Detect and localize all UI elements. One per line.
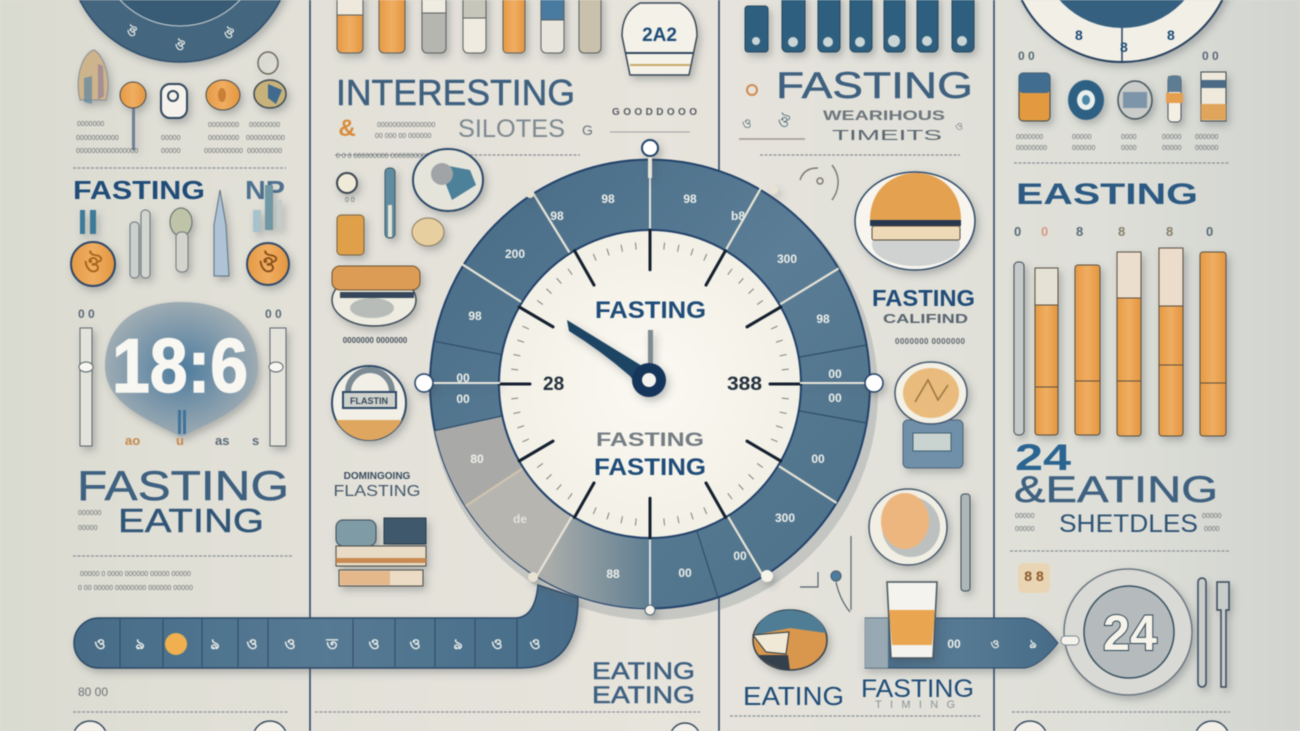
- panel 4: small tile icon: [1018, 563, 1050, 593]
- panel 1: glyph rows: u: [176, 433, 184, 448]
- dial ring labels: 00: [733, 549, 747, 563]
- dial lower labels: FASTING: [596, 430, 704, 451]
- dial lower labels: [594, 430, 706, 481]
- panel 4: small captions: 00000: [1162, 134, 1182, 141]
- panel 1: small captions: 00000: [161, 135, 181, 142]
- panel 1: glyph rows: as: [215, 433, 229, 448]
- dial ring labels: 98: [468, 309, 482, 323]
- panel 2: heading INTERESTING: [336, 72, 593, 143]
- timeline bar left: ঌ: [453, 636, 463, 653]
- dial ring labels: 00: [828, 367, 842, 381]
- dial ring labels: b8: [731, 209, 745, 223]
- dial hour ticks: [499, 230, 801, 538]
- panel 3: heading FASTING: ও: [955, 121, 963, 133]
- centre bottom labels: [592, 658, 695, 709]
- dial ring labels: 98: [816, 312, 830, 326]
- dial ring labels: 00: [456, 392, 470, 406]
- panel 4: small captions: 00000000: [1016, 145, 1047, 152]
- dial ring labels: 00: [678, 566, 692, 580]
- panel 4: small captions: 0000: [1121, 134, 1137, 141]
- panel 2: heading INTERESTING: INTERESTING: [336, 72, 575, 113]
- panel 4: small glyphs top: 0 0: [1202, 49, 1219, 63]
- panel 3: heading FASTING: ও: [742, 116, 752, 131]
- centre bottom labels: EATING: [592, 658, 695, 685]
- panel 4: heading EASTING: EASTING: [1016, 178, 1198, 211]
- panel 1: small captions: 00000: [161, 148, 181, 155]
- panel 4: small tile icon: 8 8: [1024, 568, 1044, 584]
- panel 2: food and ring icons: [332, 149, 483, 326]
- panel 1: small captions: 0000000000000000: [76, 148, 138, 155]
- panel 4: small captions: 0000: [1121, 145, 1137, 152]
- panel 1: small captions: 0000000000: [204, 148, 243, 155]
- panel 4: heading 24 & EATING SHETDLES: SHETDLES: [1059, 510, 1198, 538]
- panel 3: heading FASTING: ঔ: [778, 113, 791, 131]
- timeline bar left: ও: [491, 636, 503, 653]
- panel 3: bottom labels: EATING: [743, 681, 844, 711]
- timeline bar left: ত: [325, 636, 338, 653]
- panel 1: glyph rows: 0 0: [78, 307, 95, 321]
- panel 3: heading FASTING: FASTING: [776, 65, 973, 106]
- dial ring labels: 300: [775, 511, 795, 525]
- panel 2: top bars: [337, 0, 601, 53]
- dial: top-left cropped: [68, 0, 292, 62]
- panel 1: glyph rows: s: [252, 433, 259, 448]
- panel 1: caption lines: 80 00: [78, 685, 108, 699]
- panel 3: burger plate: [855, 172, 975, 270]
- panel 4: 24 hour plate: [1061, 569, 1192, 695]
- dial face: [499, 230, 801, 538]
- panel 1: heading FASTING EATING: EATING: [118, 502, 264, 539]
- panel 4: knife and fork: [1198, 578, 1229, 687]
- panel 2: small titles: FLASTING: [334, 483, 420, 500]
- panel 4: glyph row: 8: [1166, 224, 1173, 239]
- dial: top-left cropped: ঔ: [175, 38, 185, 53]
- panel 3: timeline bar right: 00: [947, 637, 961, 651]
- centre bottom labels: EATING: [592, 682, 695, 709]
- dial ring labels: 00: [828, 391, 842, 405]
- panel 2: small caption lines: 0 0: [345, 197, 355, 204]
- dial numbers: [543, 374, 762, 395]
- panel 1: heading FASTING EATING: [77, 462, 289, 539]
- panel 3: timeline bar right: ও: [991, 637, 1000, 651]
- panel 2: 2A2 badge: [622, 3, 697, 75]
- panel 4: small captions: 00000: [1072, 134, 1092, 141]
- panel 2: meter icon: [332, 366, 406, 440]
- panel 1: small captions: 000000000: [247, 148, 282, 155]
- panel 2: small titles: DOMINGOING: [344, 471, 411, 482]
- panel 3: heading FASTING: [742, 65, 973, 144]
- dial ring labels: de: [513, 512, 527, 526]
- panel 2: small titles: 0000000 0000000: [343, 336, 408, 345]
- panel 4: small glyphs top: [1018, 49, 1219, 63]
- timeline bar left: ও: [368, 636, 380, 653]
- dial ring labels: 300: [777, 252, 797, 266]
- panel 3: meter and scale: [895, 362, 967, 468]
- panel 1: utensils and orange badges: [71, 185, 289, 286]
- panel 1: small captions: 0000000: [77, 121, 104, 128]
- panel 3: timeline bar right: [860, 618, 1058, 668]
- panel 3: food sphere: [753, 610, 827, 670]
- panel 4: heading 24 & EATING SHETDLES: 24: [1015, 437, 1072, 478]
- panel 2: small caption lines: 000000000000000: [377, 122, 436, 129]
- dial: top-right cropped: 8: [1167, 27, 1175, 43]
- timeline bar left: ও: [246, 636, 258, 653]
- panel 4: side captions: [1015, 513, 1222, 533]
- panel 3: timeline bar right: ঌ: [1029, 637, 1037, 651]
- timeline bar left: ঌ: [210, 636, 220, 653]
- timeline bar left: [74, 585, 578, 668]
- panel 4: small captions: 0000000: [1016, 134, 1043, 141]
- dial title FASTING: FASTING: [595, 297, 706, 324]
- panel 3: plate and knife: [869, 489, 970, 591]
- panel 1: caption lines: 0 00 00000 00000000 000000 00000: [78, 585, 193, 592]
- panel 4: heading 24 & EATING SHETDLES: [1014, 437, 1218, 538]
- panel 4: glyph row: 0: [1041, 224, 1048, 239]
- dial ring labels: 88: [606, 567, 620, 581]
- panel 1: small captions: 00000000000: [76, 135, 119, 142]
- clock hands: [567, 320, 666, 397]
- panel 1: utensils and orange badges: ঔ: [259, 250, 278, 277]
- panel 4: small glyphs top: 0 0: [1018, 49, 1035, 63]
- panel 4: glyph row: [1014, 224, 1213, 239]
- panel 2: heading INTERESTING: &: [338, 115, 356, 142]
- panel 4: 24 hour plate: 24: [1103, 605, 1157, 661]
- dial ring labels: 98: [550, 209, 564, 223]
- panel 2: small caption lines: 0 0 0 000000000 0000000000000000: [336, 153, 453, 160]
- dial ring labels: 00: [456, 371, 470, 385]
- panel 3: heading FASTING: TIMEITS: [832, 127, 942, 144]
- panel 3: FASTING sub-block: CALIFIND: [883, 311, 968, 326]
- panel 3: bulb glyph: [800, 165, 838, 200]
- panel 2: meter icon: FLASTIN: [350, 396, 388, 406]
- panel 2: small caption lines: GOODDOOO: [612, 107, 697, 118]
- panel 3: FASTING sub-block: FASTING: [872, 285, 975, 311]
- panel 1: caption lines: 00000 0 0000 000000 00000 00000: [80, 571, 191, 578]
- panel 3: FASTING sub-block: [872, 285, 975, 346]
- panel 1: glyph rows: [78, 307, 282, 448]
- dial knobs and spokes: [415, 140, 883, 615]
- panel 1: 18:6 badge: [105, 302, 258, 437]
- dial outer ring: [430, 160, 870, 608]
- panel 2: heading INTERESTING: G: [582, 122, 593, 138]
- dial: top-left cropped: ঔ: [224, 26, 234, 41]
- dial segment dividers: [434, 160, 867, 608]
- panel 3: top bars: [745, 0, 974, 52]
- panel 1: glyph rows: 0 0: [265, 307, 282, 321]
- panel 4: glyph row: 0: [1014, 224, 1021, 239]
- timeline bar left: ও: [94, 636, 106, 653]
- panel 4: side captions: 00000: [1015, 513, 1035, 520]
- dial: top-right cropped: 8: [1120, 39, 1128, 55]
- panel 3: small tool glyph: [800, 536, 851, 612]
- panel 4: glyph row: 8: [1076, 224, 1083, 239]
- panel 4: side captions: 0000: [1204, 526, 1220, 533]
- panel 1: heading FASTING: [73, 175, 285, 205]
- panel 4: bar chart: [1014, 248, 1226, 436]
- panel 1: small captions: [76, 121, 285, 155]
- dial grey segments: [393, 122, 907, 646]
- panel 4: glyph row: 0: [1206, 224, 1213, 239]
- panel 4: top food icons: [1019, 72, 1226, 122]
- panel 2: small titles: [334, 336, 420, 500]
- dial: top-right cropped: 8: [1075, 27, 1083, 43]
- panel 1: small captions: 00000000: [249, 122, 280, 129]
- dial ring labels: 98: [601, 192, 615, 206]
- dial ring labels: [456, 192, 842, 581]
- panel 1: caption lines: [78, 510, 193, 699]
- panel 3: glass of drink: [887, 582, 937, 658]
- panel 4: small captions: 000000: [1195, 145, 1218, 152]
- panel 4: small captions: [1016, 134, 1218, 152]
- timeline bar left: ও: [284, 636, 296, 653]
- panel 4: side captions: 00000: [1015, 526, 1035, 533]
- panel 2: stacked box icon: [336, 518, 426, 586]
- panel 3: bottom labels: TIMING: [875, 699, 955, 711]
- panel 1: side sliders: [79, 328, 286, 446]
- dial ring labels: 200: [505, 247, 525, 261]
- panel 1: glyph rows: ao: [125, 433, 140, 448]
- panel 1: heading FASTING EATING: FASTING: [77, 462, 289, 509]
- panel 3: heading FASTING: WEARIHOUS: [823, 107, 945, 123]
- panel 3: FASTING sub-block: 0000000 0000000: [895, 337, 966, 346]
- panel 2: small caption lines: 00 000 00 000000: [375, 133, 432, 140]
- dial: top-right cropped: [1010, 0, 1234, 62]
- panel 4: small captions: 000000: [1072, 145, 1095, 152]
- main dial: [393, 122, 907, 646]
- panel 1: utensils and orange badges: ঔ: [84, 250, 103, 277]
- timeline bar left: ও: [529, 636, 541, 653]
- panel 1: small captions: 00000000: [208, 122, 239, 129]
- panel 1: heading FASTING: FASTING: [73, 175, 205, 205]
- timeline bar left: ঌ: [135, 636, 145, 653]
- panel 4: glyph row: 8: [1118, 224, 1125, 239]
- panel 1: 18:6 badge: 18:6: [112, 324, 248, 409]
- panel 1: caption lines: 000000: [78, 510, 101, 517]
- dial numbers: 388: [727, 374, 762, 395]
- timeline bar left: ও: [409, 636, 421, 653]
- bottom half-circles: [73, 721, 1229, 731]
- panel 2: heading INTERESTING: SILOTES: [458, 115, 565, 143]
- dial ring labels: 98: [683, 192, 697, 206]
- panel 1: small captions: 00000000: [208, 135, 239, 142]
- panel 1: small captions: 0000000000: [246, 135, 285, 142]
- panel 1: caption lines: 00000: [78, 525, 98, 532]
- panel 1: heading FASTING: NP: [245, 175, 285, 205]
- dial ring labels: 80: [470, 452, 484, 466]
- panel 2: small caption lines: [336, 107, 697, 204]
- panel 2: 2A2 badge: 2A2: [642, 25, 677, 46]
- panel 3: bottom labels: [743, 675, 974, 711]
- panel 4: heading 24 & EATING SHETDLES: &EATING: [1014, 469, 1218, 510]
- panel 1: top food icons: [78, 50, 286, 150]
- dial numbers: 28: [543, 374, 564, 395]
- panel 3: bottom labels: FASTING: [861, 675, 974, 703]
- dial: top-left cropped: ঔ: [127, 24, 137, 39]
- dial lower labels: FASTING: [594, 454, 706, 481]
- dial ring labels: 00: [811, 452, 825, 466]
- panel 4: side captions: 00000: [1202, 513, 1222, 520]
- panel 4: small captions: 00000: [1162, 145, 1182, 152]
- panel 4: small captions: 000000: [1195, 134, 1218, 141]
